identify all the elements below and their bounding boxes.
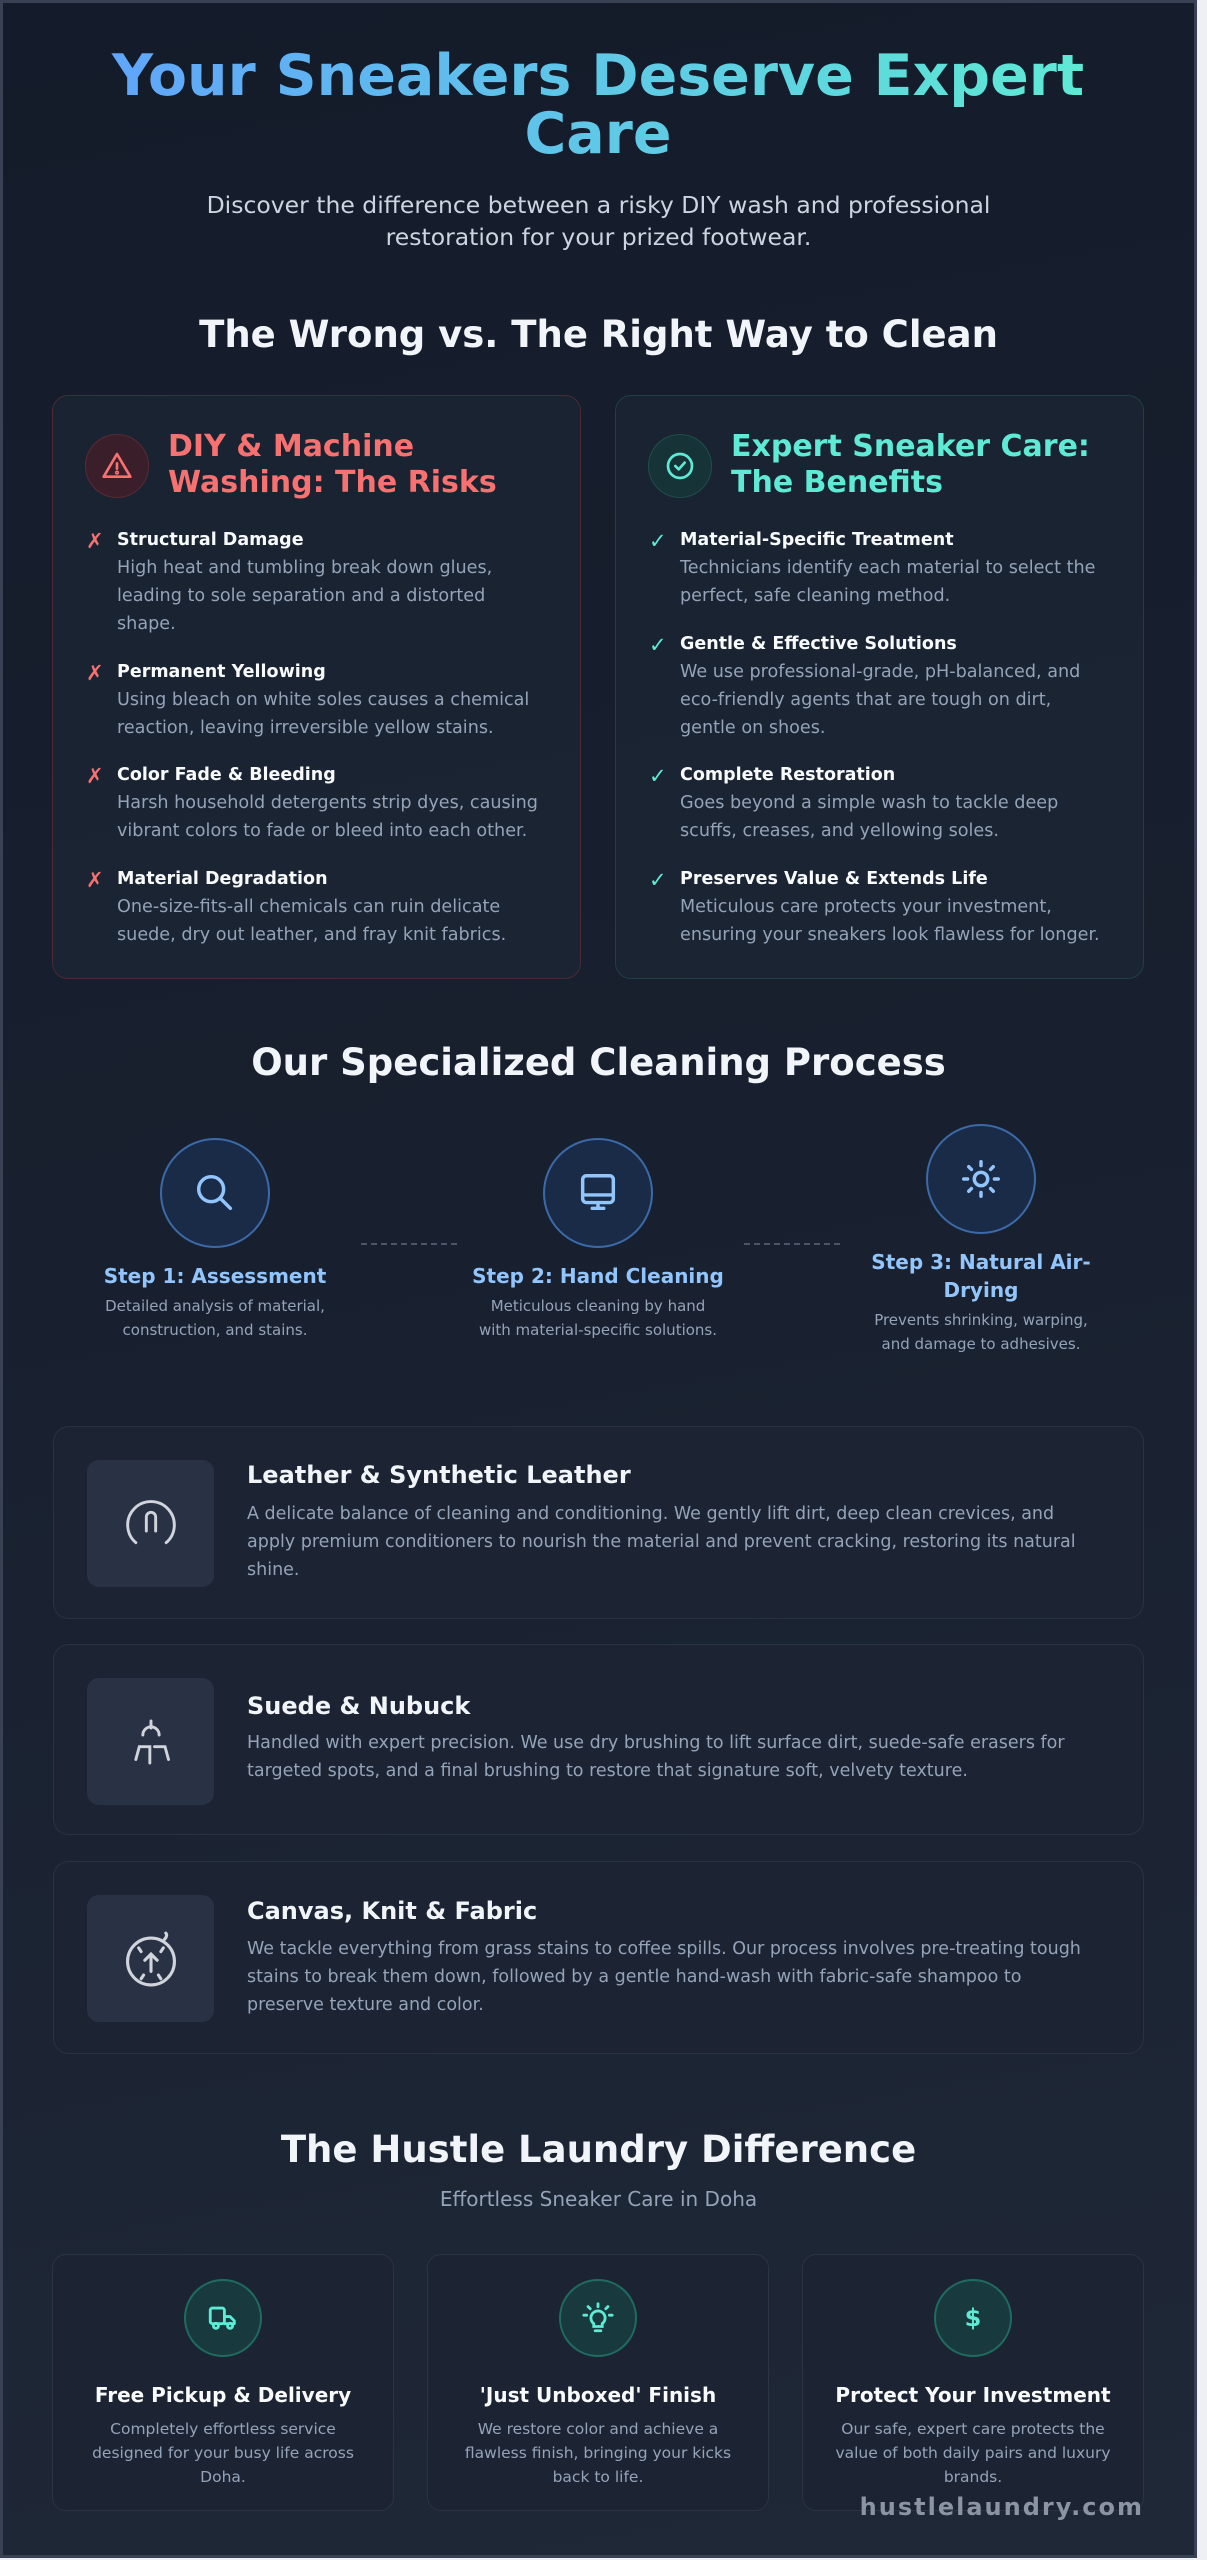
- card: unboxed: 'Just Unboxed' Finish: [480, 2383, 716, 2407]
- card: pickup: Completely effortless service: [110, 2420, 336, 2438]
- watermark: hustlelaundry.com: [860, 2493, 1144, 2521]
- icon: suede: [87, 1678, 214, 1805]
- card: unboxed: [427, 2254, 769, 2511]
- item: preserves value: Preserves Value & Extends Life: [680, 869, 988, 889]
- item: material-specific: Material-Specific Treatment: [680, 530, 954, 550]
- title: Your Sneakers Deserve Expert: [112, 43, 1084, 109]
- card: investment: [802, 2254, 1144, 2511]
- item: material degradation: [86, 868, 506, 945]
- panel heading: Expert Sneaker Care:: [731, 429, 1090, 464]
- item: yellowing: reaction, leaving irreversible yellow stains.: [117, 718, 494, 738]
- card: pickup: designed for your busy life across: [92, 2444, 354, 2462]
- card: leather: apply premium conditioners to nourish the material and prevent cracking, restoring its natural: [247, 1532, 1076, 1552]
- icon: warning: [85, 434, 149, 498]
- icon: dollar: $: [965, 2304, 981, 2332]
- item: structural damage: leading to sole separation and a distorted: [117, 586, 485, 606]
- item: complete restoration: [649, 764, 1058, 841]
- item: gentle solutions: We use professional-grade, pH-balanced, and: [680, 662, 1080, 682]
- card: suede: Handled with expert precision. We use dry brushing to lift surface dirt, suede-safe erasers for: [247, 1733, 1065, 1753]
- item: color fade: Harsh household detergents strip dyes, causing: [117, 793, 538, 813]
- icon: monitor: [543, 1138, 653, 1248]
- item: structural damage: High heat and tumbling break down glues,: [117, 558, 492, 578]
- card: leather: [53, 1426, 1144, 1619]
- heading: difference: The Hustle Laundry Difference: [281, 2128, 916, 2171]
- step 3: Drying: [944, 1278, 1018, 1302]
- card: canvas: stains to break them down, followed by a gentle hand-wash with fabric-safe shampoo to: [247, 1967, 1021, 1987]
- item: preserves value: ensuring your sneakers look flawless for longer.: [680, 925, 1100, 945]
- card: investment: Our safe, expert care protects the: [841, 2420, 1105, 2438]
- item: complete restoration: scuffs, creases, and yellowing soles.: [680, 821, 999, 841]
- item: preserves value: Meticulous care protects your investment,: [680, 897, 1052, 917]
- panel heading: [731, 429, 1090, 500]
- item: preserves value: [649, 868, 1100, 945]
- arrow: dashed connector 1: [361, 1243, 457, 1245]
- card: investment: brands.: [944, 2468, 1002, 2486]
- step 3: Prevents shrinking, warping,: [874, 1311, 1088, 1329]
- panel: DIY risks: ✗: [86, 764, 104, 788]
- item: color fade: Color Fade & Bleeding: [117, 765, 336, 785]
- panel: expert benefits: [615, 395, 1144, 979]
- step 2: Meticulous cleaning by hand: [491, 1297, 705, 1315]
- step 1: Step 1: Assessment: [104, 1264, 326, 1288]
- panel: expert benefits: ✓: [649, 764, 667, 788]
- card: suede: Suede & Nubuck: [247, 1692, 470, 1720]
- card: unboxed: back to life.: [553, 2468, 643, 2486]
- icon: truck: [184, 2279, 262, 2357]
- item: material-specific: perfect, safe cleaning method.: [680, 586, 950, 606]
- item: structural damage: shape.: [117, 614, 176, 634]
- panel: DIY risks: ✗: [86, 868, 104, 892]
- step 1: [104, 1138, 326, 1339]
- item: color fade: vibrant colors to fade or bleed into each other.: [117, 821, 527, 841]
- panel heading: DIY & Machine: [168, 429, 414, 464]
- subtitle: Discover the difference between a risky DIY wash and professional: [207, 191, 990, 219]
- item: material-specific: Technicians identify each material to select the: [680, 558, 1095, 578]
- card: pickup: Doha.: [200, 2468, 246, 2486]
- panel heading: Washing: The Risks: [168, 465, 497, 500]
- card: canvas: Canvas, Knit & Fabric: [247, 1897, 537, 1925]
- subtitle: restoration for your prized footwear.: [386, 223, 811, 251]
- card: investment: value of both daily pairs and luxury: [835, 2444, 1111, 2462]
- item: gentle solutions: eco-friendly agents that are tough on dirt,: [680, 690, 1051, 710]
- panel: expert benefits: ✓: [649, 868, 667, 892]
- step 3: [871, 1124, 1091, 1353]
- item: complete restoration: Complete Restoration: [680, 765, 895, 785]
- heading: wrong vs right: The Wrong vs. The Right Way to Clean: [199, 313, 998, 356]
- panel: DIY risks: ✗: [86, 661, 104, 685]
- card: unboxed: flawless finish, bringing your kicks: [465, 2444, 731, 2462]
- card: investment: Protect Your Investment: [835, 2383, 1111, 2407]
- panel heading: [168, 429, 497, 500]
- item: material degradation: suede, dry out leather, and fray knit fabrics.: [117, 925, 506, 945]
- panel: DIY risks: ✗: [86, 529, 104, 553]
- panel: expert benefits: ✓: [649, 633, 667, 657]
- item: complete restoration: Goes beyond a simple wash to tackle deep: [680, 793, 1058, 813]
- item: structural damage: Structural Damage: [117, 530, 304, 550]
- panel: expert benefits: ✓: [649, 529, 667, 553]
- card: pickup: [52, 2254, 394, 2511]
- icon: canvas: [87, 1895, 214, 2022]
- icon: check circle: [648, 434, 712, 498]
- item: gentle solutions: Gentle & Effective Solutions: [680, 634, 957, 654]
- card: canvas: [53, 1861, 1144, 2054]
- item: material degradation: Material Degradation: [117, 869, 328, 889]
- item: gentle solutions: gentle on shoes.: [680, 718, 826, 738]
- icon: leather: [87, 1460, 214, 1587]
- step 3: and damage to adhesives.: [882, 1335, 1080, 1353]
- panel: DIY risks: [52, 395, 581, 979]
- icon: bulb: [559, 2279, 637, 2357]
- subtitle: [207, 191, 990, 251]
- item: yellowing: [86, 661, 529, 738]
- card: leather: A delicate balance of cleaning and conditioning. We gently lift dirt, deep clean crevices, and: [247, 1504, 1054, 1524]
- title: Care: [524, 101, 672, 167]
- card: suede: [53, 1644, 1144, 1835]
- card: canvas: We tackle everything from grass stains to coffee spills. Our process involves pre-treating tough: [247, 1939, 1081, 1959]
- subheading: Effortless Sneaker Care in Doha: [440, 2187, 757, 2211]
- step 3: Step 3: Natural Air-: [871, 1250, 1091, 1274]
- arrow: dashed connector 2: [744, 1243, 840, 1245]
- step 1: construction, and stains.: [123, 1321, 307, 1339]
- item: material degradation: One-size-fits-all chemicals can ruin delicate: [117, 897, 500, 917]
- panel heading: The Benefits: [731, 465, 943, 500]
- card: unboxed: We restore color and achieve a: [478, 2420, 718, 2438]
- card: canvas: preserve texture and color.: [247, 1995, 484, 2015]
- step 1: Detailed analysis of material,: [105, 1297, 325, 1315]
- item: structural damage: [86, 529, 492, 634]
- icon: sun: [926, 1124, 1036, 1234]
- card: suede: targeted spots, and a final brushing to restore that signature soft, velvety texture.: [247, 1761, 968, 1781]
- card: leather: Leather & Synthetic Leather: [247, 1461, 631, 1489]
- item: material-specific: [649, 529, 1095, 606]
- title: [108, 47, 1088, 163]
- step 2: Step 2: Hand Cleaning: [472, 1264, 724, 1288]
- item: yellowing: Using bleach on white soles causes a chemical: [117, 690, 529, 710]
- item: color fade: [86, 764, 538, 841]
- icon: dollar: [934, 2279, 1012, 2357]
- item: yellowing: Permanent Yellowing: [117, 662, 326, 682]
- icon: magnifier: [160, 1138, 270, 1248]
- heading: process: Our Specialized Cleaning Process: [251, 1041, 946, 1084]
- step 2: with material-specific solutions.: [479, 1321, 717, 1339]
- card: pickup: Free Pickup & Delivery: [95, 2383, 351, 2407]
- step 2: [472, 1138, 724, 1339]
- item: gentle solutions: [649, 633, 1080, 738]
- card: leather: shine.: [247, 1560, 300, 1580]
